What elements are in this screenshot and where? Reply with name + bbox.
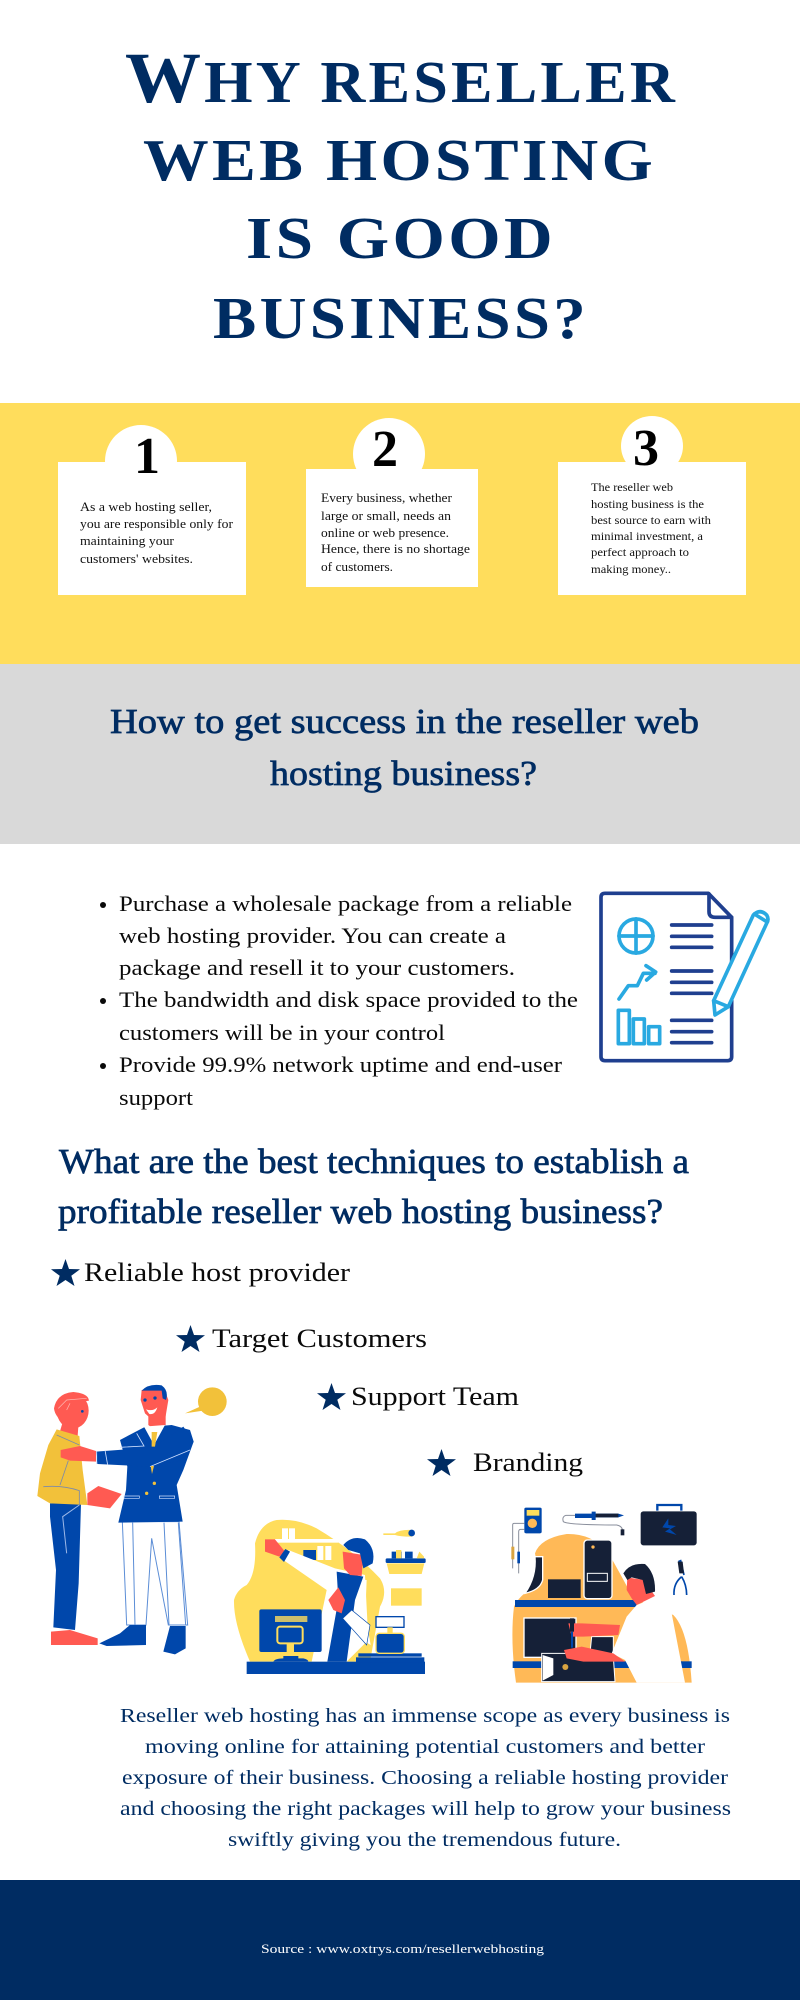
card 2: Hence, there is no shortage <box>321 541 470 556</box>
technique: support team: Support Team <box>351 1382 519 1411</box>
panel: success heading: hosting business? <box>270 754 537 793</box>
technique: target customers: Target Customers <box>212 1324 427 1353</box>
bullet list: The bandwidth and disk space provided to the <box>119 987 578 1012</box>
panel: three reasons <box>0 403 800 664</box>
card 3: perfect approach to <box>591 545 689 559</box>
conclusion text: Reseller web hosting has an immense scope as every business is <box>120 1705 730 1727</box>
footer: source: Source : www.oxtrys.com/resellerwebhosting <box>261 1941 545 1956</box>
bullet list: Provide 99.9% network uptime and end-user <box>119 1052 563 1077</box>
technique: branding: Branding <box>473 1448 583 1477</box>
bullet list <box>100 891 578 1110</box>
card 1 <box>58 425 246 595</box>
illustration: technician repairing computer <box>511 1505 697 1683</box>
card 1: As a web hosting seller, <box>80 499 212 514</box>
card 2 <box>306 418 478 587</box>
card 3: The reseller web <box>591 480 673 494</box>
technique: reliable host provider: Reliable host provider <box>84 1258 350 1287</box>
card 3: best source to earn with <box>591 513 711 527</box>
footer: source <box>0 1880 800 2000</box>
card 1: maintaining your <box>80 533 175 548</box>
title: WEB HOSTING <box>143 127 656 193</box>
card 3: hosting business is the <box>591 497 704 511</box>
card 2: large or small, needs an <box>321 508 452 523</box>
icon: document with charts and pencil <box>601 893 768 1061</box>
conclusion text <box>120 1705 731 1851</box>
conclusion text: and choosing the right packages will help to grow your business <box>120 1798 731 1820</box>
card 2: of customers. <box>321 559 393 574</box>
bullet list: customers will be in your control <box>119 1020 445 1045</box>
card 3: making money.. <box>591 562 671 576</box>
title <box>125 38 678 351</box>
card 3 <box>558 416 746 595</box>
bullet list: Purchase a wholesale package from a reliable <box>119 891 572 916</box>
card 1: 1 <box>134 428 160 485</box>
title: IS GOOD <box>246 205 556 271</box>
illustration: two men shaking hands <box>37 1385 227 1654</box>
panel: success heading: How to get success in the reseller web <box>110 702 699 741</box>
conclusion text: exposure of their business. Choosing a reliable hosting provider <box>122 1767 728 1789</box>
card 2: online or web presence. <box>321 525 449 540</box>
card 2: 2 <box>372 421 398 478</box>
panel: success heading <box>0 664 800 844</box>
card 2: Every business, whether <box>321 490 453 505</box>
title: BUSINESS? <box>213 285 589 351</box>
conclusion text: moving online for attaining potential customers and better <box>145 1736 705 1758</box>
heading: techniques: profitable reseller web hosting business? <box>58 1192 663 1231</box>
card 3: 3 <box>633 420 659 477</box>
conclusion text: swiftly giving you the tremendous future. <box>228 1829 621 1851</box>
card 1: customers' websites. <box>80 551 193 566</box>
heading: techniques <box>58 1142 689 1231</box>
bullet list: package and resell it to your customers. <box>119 955 515 980</box>
technique: branding <box>427 1448 583 1477</box>
illustration: pharmacist at counter <box>234 1520 426 1674</box>
card 3: minimal investment, a <box>591 529 704 543</box>
bullet list: web hosting provider. You can create a <box>119 923 506 948</box>
bullet list: support <box>119 1085 194 1110</box>
title: WHY RESELLER <box>125 38 678 118</box>
heading: techniques: What are the best techniques to establish a <box>59 1142 689 1181</box>
card 1: you are responsible only for <box>80 516 234 531</box>
